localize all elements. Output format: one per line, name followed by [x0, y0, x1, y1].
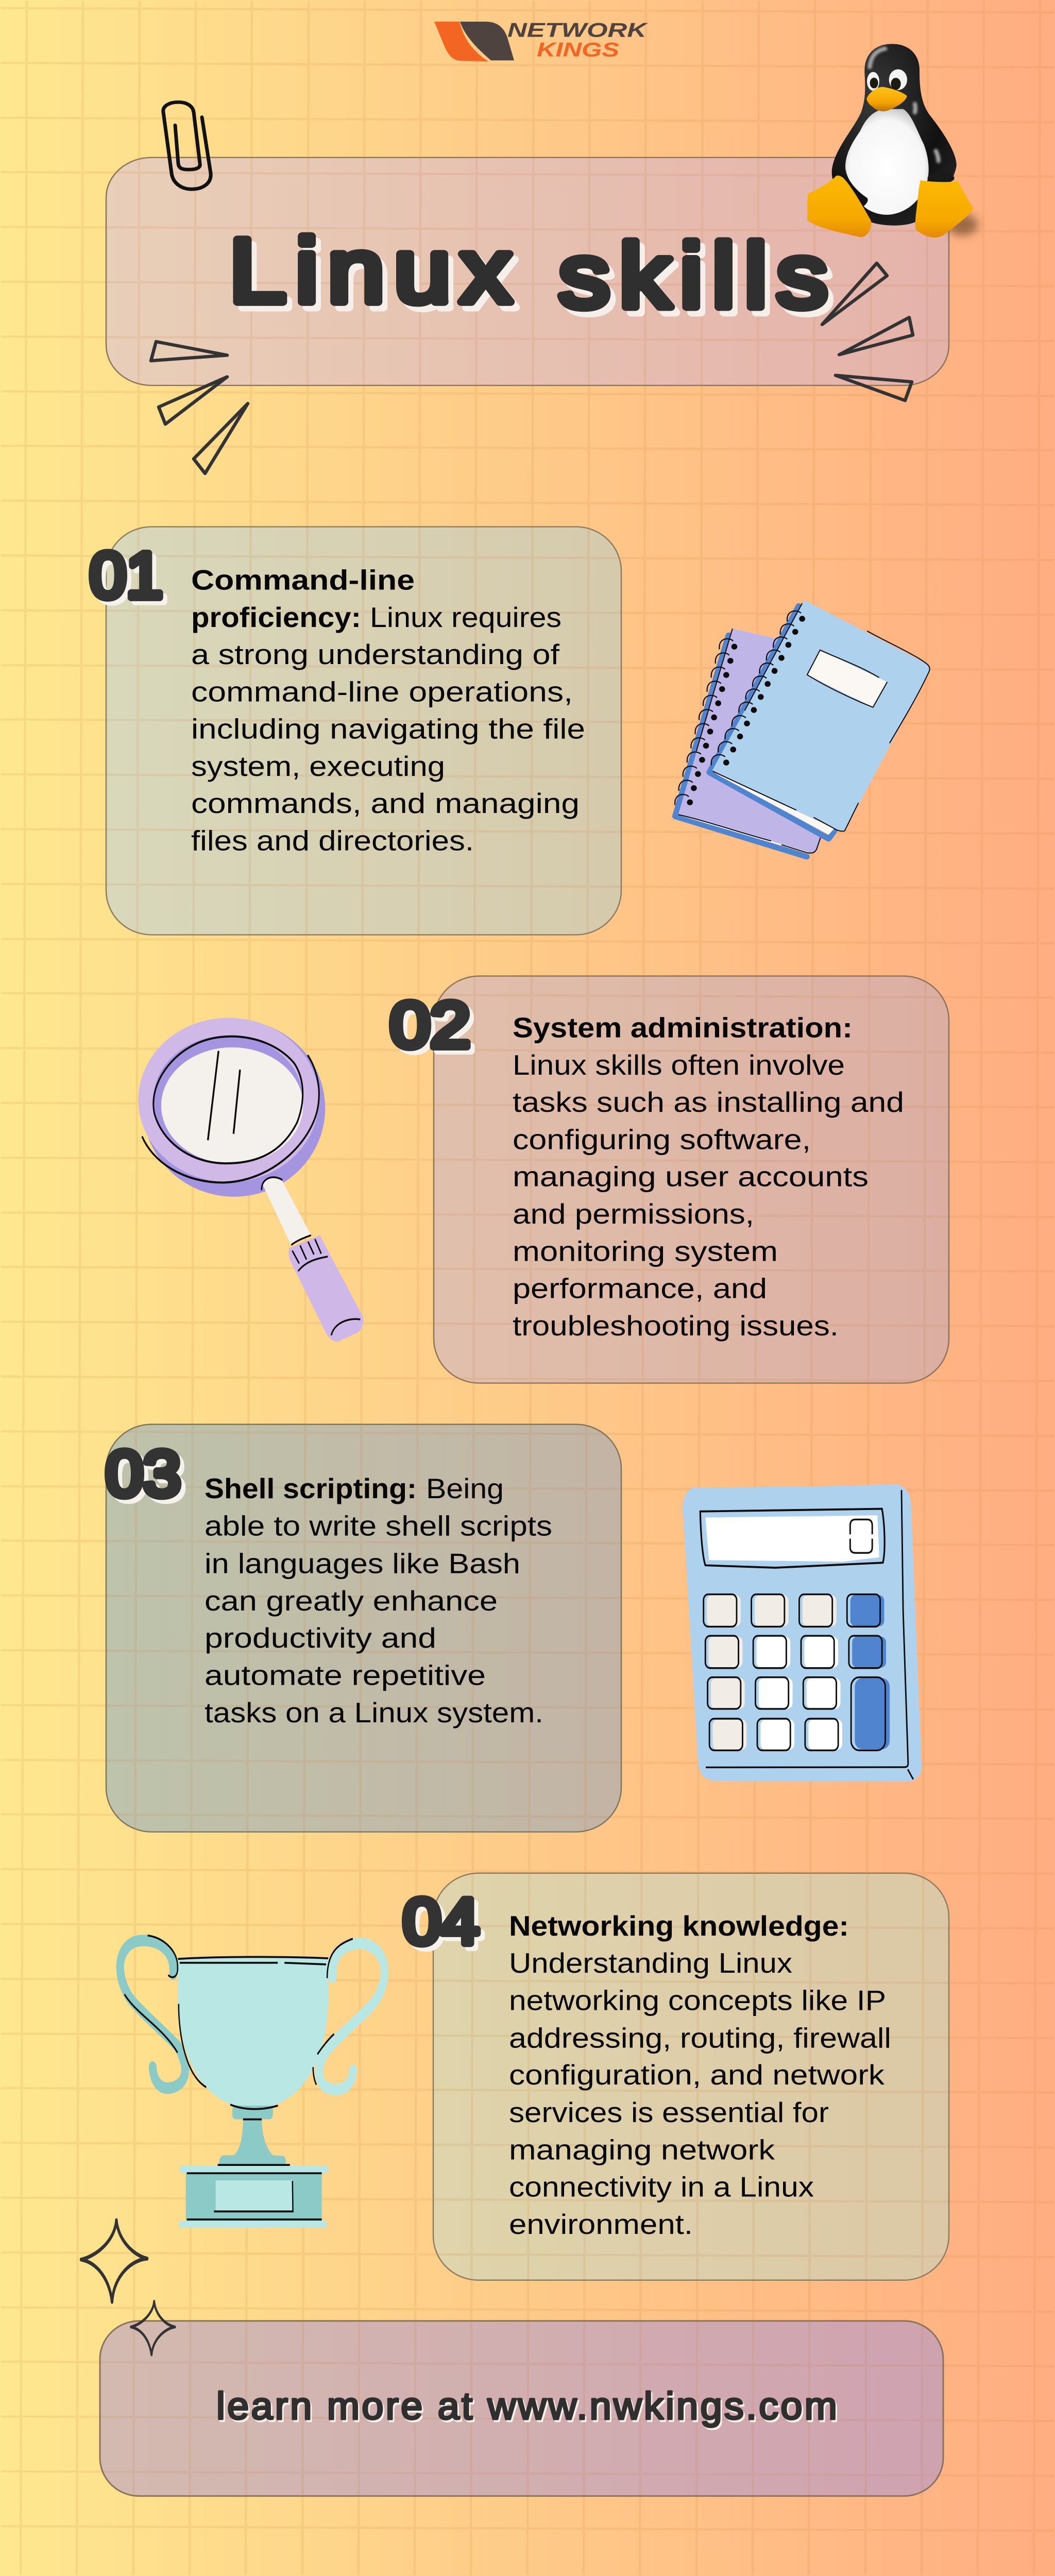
handle details [262, 1177, 360, 1335]
icon: magnifying glass [138, 1018, 363, 1342]
text block 1: files and directories. [191, 825, 474, 856]
text block 3: in languages like Bash [205, 1548, 520, 1580]
trophy ink lines [125, 1936, 353, 2219]
text block 2: managing user accounts [513, 1161, 869, 1193]
penguin left foot [807, 176, 871, 238]
text block 2: troubleshooting issues. [513, 1310, 839, 1342]
trophy left handle [120, 1940, 185, 2088]
lens rim [138, 1018, 319, 1182]
footer call to action: learn more at www.nwkings.com [216, 2384, 837, 2427]
text block 2: configuring software, [513, 1124, 811, 1155]
calculator body [683, 1484, 922, 1782]
penguin belly [845, 109, 929, 215]
logo word KINGS: KINGS [537, 39, 619, 61]
penguin arm [928, 173, 955, 183]
text block 1: commands, and managing [191, 788, 580, 819]
penguin right foot [915, 180, 973, 238]
trophy cup [178, 1958, 328, 2109]
text block 1: system, executing [191, 750, 445, 782]
text block 4: configuration, and network [509, 2059, 884, 2091]
text block 3: Being [426, 1473, 504, 1504]
panel: title background [106, 158, 949, 385]
penguin eyes [867, 69, 907, 91]
icon: paperclip [163, 102, 211, 189]
text block 1: a strong understanding of [191, 639, 560, 670]
icon: notebooks [675, 600, 930, 857]
panel: card 3 background [106, 1425, 621, 1832]
text block 1: Command-line [191, 564, 415, 596]
text block 2: performance, and [513, 1273, 767, 1304]
text block 3: automate repetitive [205, 1659, 486, 1691]
text block 2: tasks such as installing and [513, 1087, 904, 1118]
back notebook cover [675, 629, 821, 857]
calculator keys [704, 1595, 890, 1750]
title: Linux [229, 220, 512, 321]
penguin beak [866, 87, 907, 111]
icon: burst strokes left [151, 342, 248, 473]
title: skills [559, 225, 828, 326]
text block 4: services is essential for [509, 2097, 829, 2128]
logo: Network Kings [434, 19, 648, 61]
text block 4: networking concepts like IP [509, 1985, 886, 2016]
text block 4: Understanding Linux [509, 1947, 792, 1979]
handle grip [288, 1235, 363, 1342]
glass glare lines [208, 1051, 240, 1140]
rim outline [142, 1055, 319, 1182]
text block 1: proficiency: [191, 601, 361, 633]
logo word NETWORK: NETWORK [507, 19, 648, 41]
lens glass [161, 1047, 303, 1164]
text block 4: managing network [509, 2134, 775, 2165]
number 04: 04 [403, 1885, 479, 1957]
lens outline [154, 1037, 303, 1163]
section 3: shell scripting [106, 1437, 552, 1728]
penguin body [832, 44, 957, 226]
text block 2: and permissions, [513, 1198, 754, 1230]
text block 3: Shell scripting: [205, 1473, 417, 1504]
section 4: networking knowledge [403, 1885, 891, 2240]
panel: card 2 background [434, 976, 949, 1383]
text block 3: tasks on a Linux system. [205, 1697, 543, 1728]
text block 4: addressing, routing, firewall [509, 2022, 891, 2054]
text block 1: Linux requires [370, 601, 561, 633]
icon: Linux penguin mascot [807, 44, 978, 238]
lens shadow rim [143, 1020, 325, 1197]
text block 3: productivity and [205, 1622, 436, 1654]
panel: card 4 background [433, 1873, 949, 2280]
back notebook spiral rings [675, 639, 737, 805]
section 2: system administration [390, 989, 904, 1342]
logo mark dark [460, 22, 514, 60]
text block 1: command-line operations, [191, 676, 573, 707]
icon: calculator [683, 1484, 922, 1782]
icon: trophy [120, 1936, 384, 2228]
text block 2: Linux skills often involve [513, 1049, 845, 1081]
text block 4: environment. [509, 2209, 693, 2240]
calculator screen [700, 1509, 884, 1568]
section 1: command-line proficiency [90, 539, 585, 856]
front notebook cover [709, 600, 930, 839]
number 02: 02 [390, 989, 470, 1061]
text block 3: can greatly enhance [205, 1585, 498, 1617]
number 03: 03 [106, 1437, 181, 1510]
text block 2: System administration: [513, 1012, 853, 1044]
text block 1 [191, 564, 585, 856]
text block 2 [513, 1012, 904, 1342]
lens inner [154, 1036, 303, 1164]
panel: footer background [100, 2321, 943, 2496]
text block 2: monitoring system [513, 1235, 778, 1267]
text block 1: including navigating the file [191, 713, 585, 744]
text block 3 [205, 1473, 552, 1728]
trophy base [179, 2165, 329, 2228]
text block 4: connectivity in a Linux [509, 2171, 814, 2203]
penguin shadow [947, 214, 978, 235]
text block 4: Networking knowledge: [509, 1910, 849, 1942]
logo mark orange [434, 22, 488, 61]
text block 4 [509, 1910, 891, 2240]
icon: burst strokes right [822, 263, 913, 400]
icon: large sparkle [81, 2220, 147, 2302]
panel: card 1 background [106, 527, 621, 935]
text block 3: able to write shell scripts [205, 1510, 552, 1541]
icon: small sparkle [131, 2301, 175, 2355]
trophy right handle [319, 1943, 384, 2090]
front notebook label [807, 650, 887, 707]
number 01: 01 [90, 539, 163, 612]
trophy stem [219, 2106, 286, 2165]
body outline [706, 1490, 913, 1780]
handle shaft [262, 1177, 311, 1245]
front notebook spiral rings [711, 611, 805, 766]
penguin gloss highlights [870, 48, 939, 161]
